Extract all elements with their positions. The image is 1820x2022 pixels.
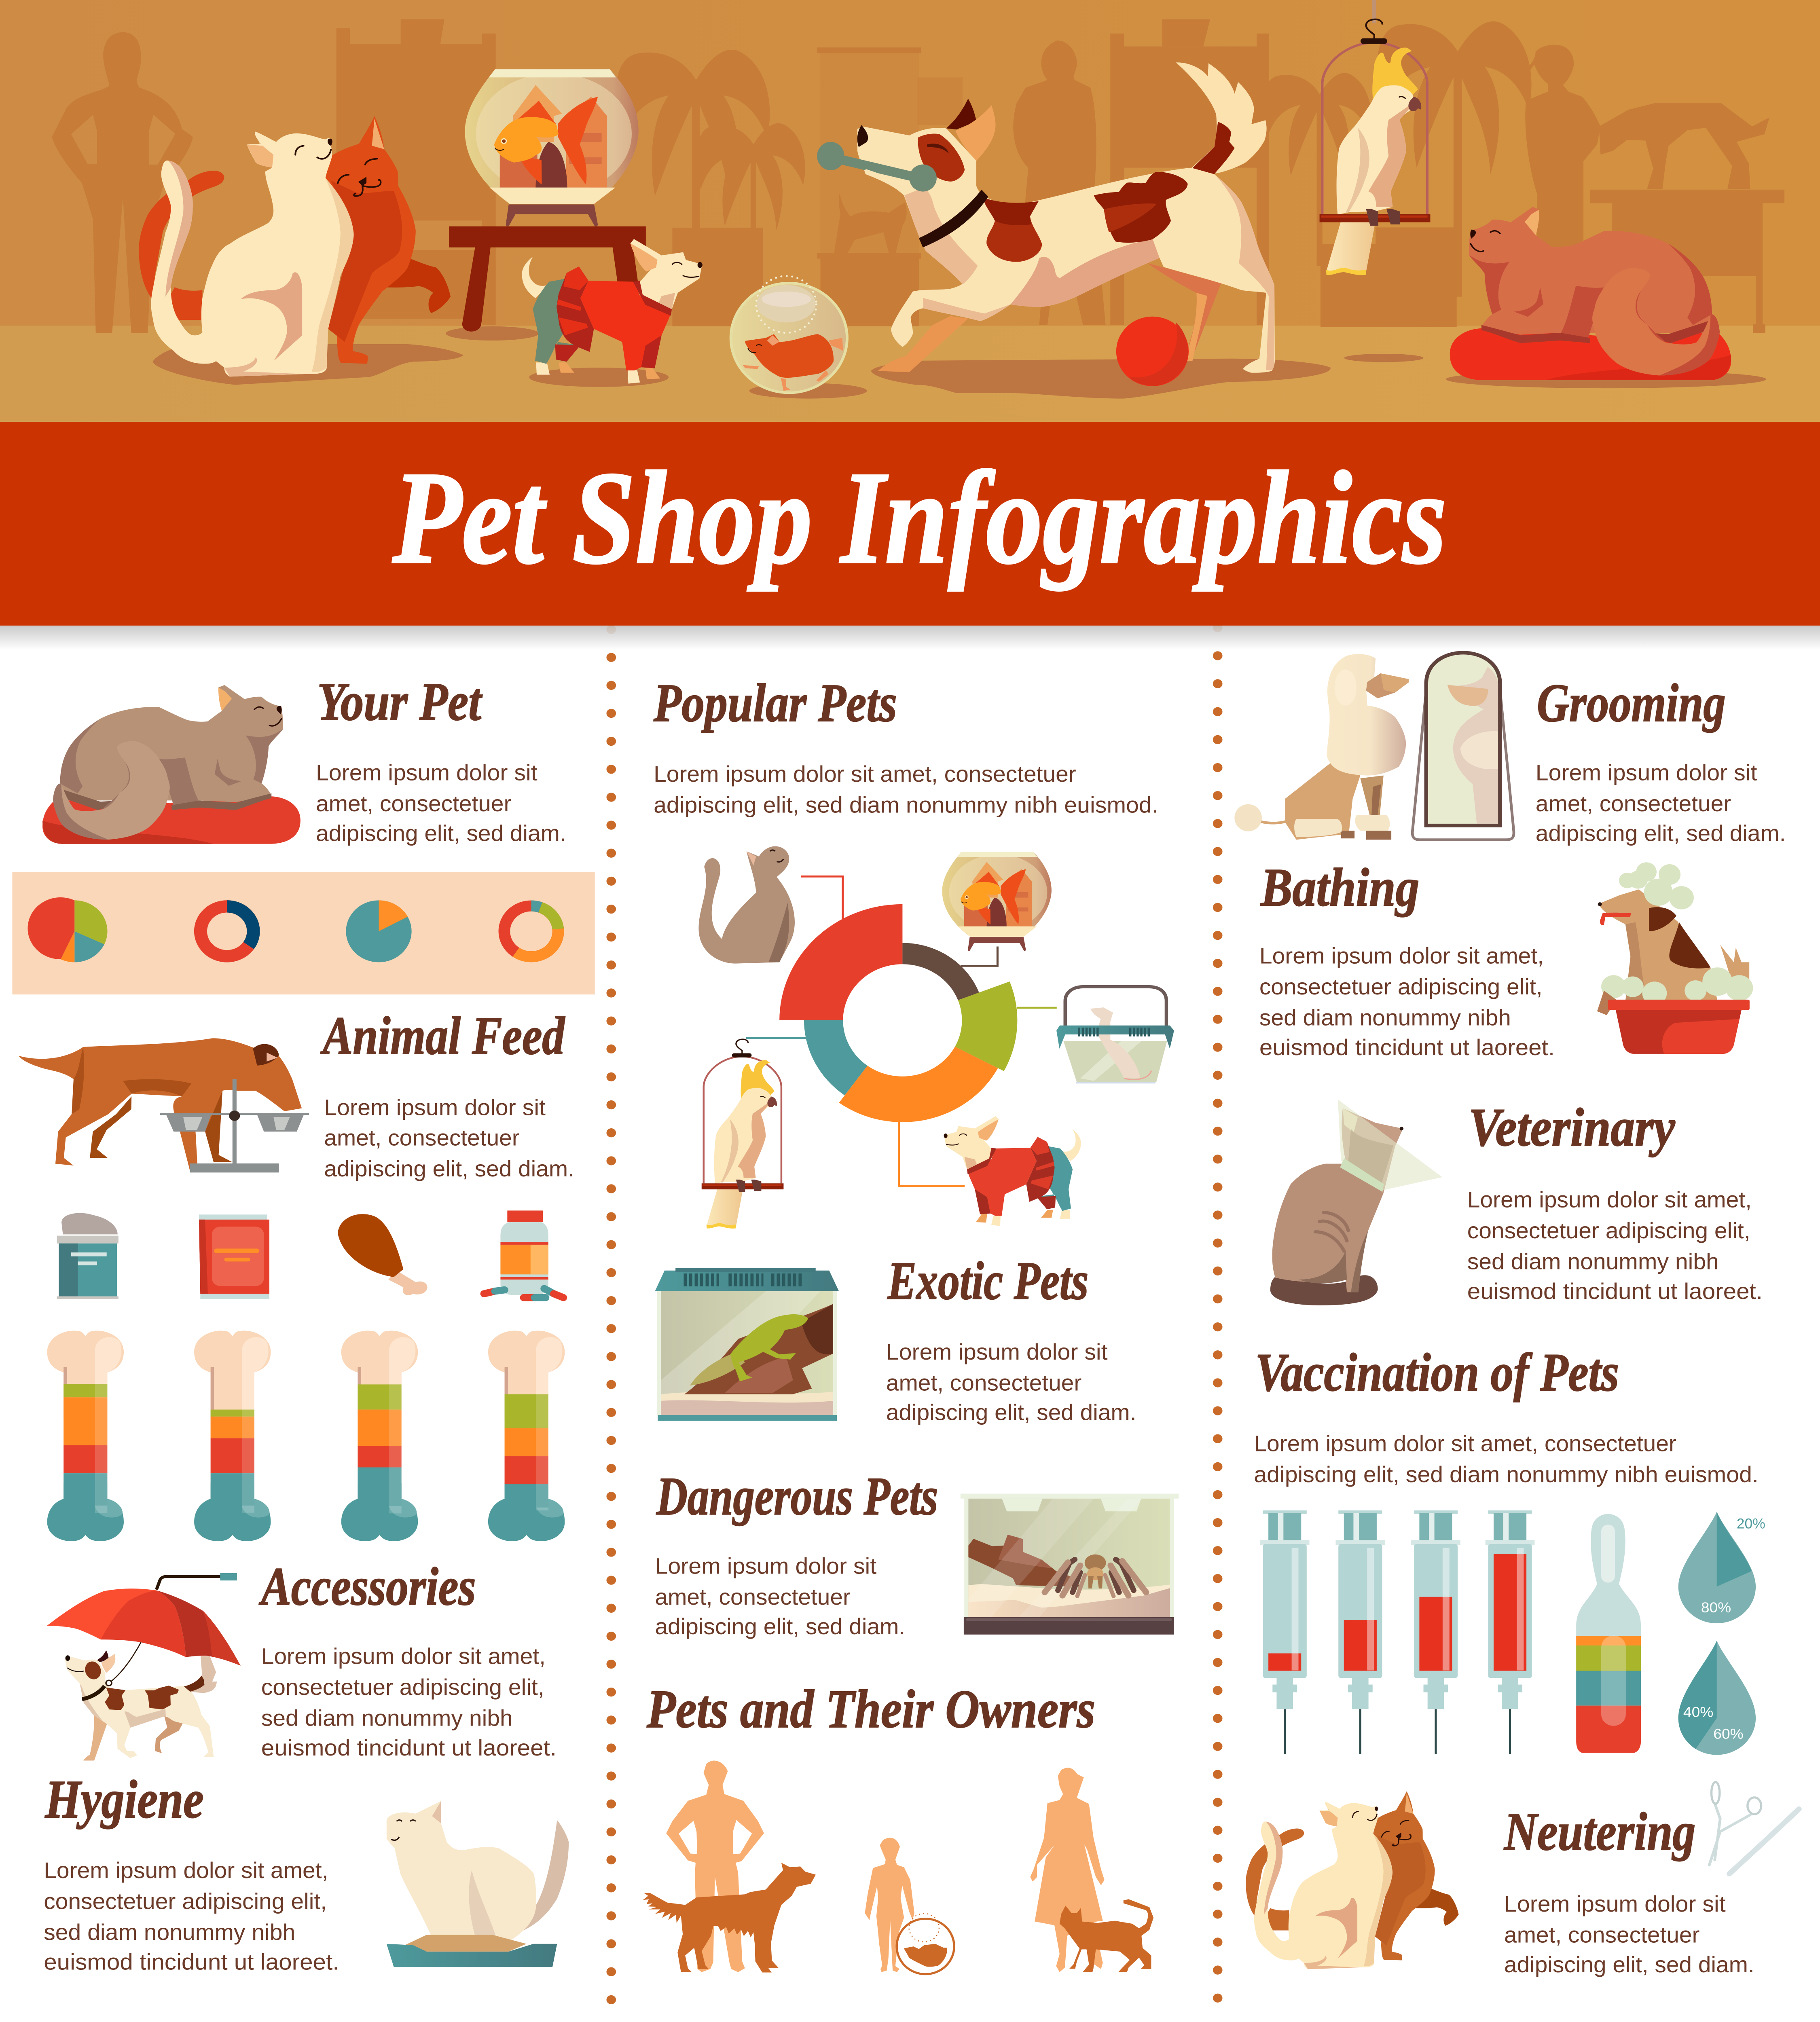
text: neutering: [1504, 1891, 1754, 1977]
text: grooming: Lorem ipsum dolor sit: [1536, 760, 1757, 785]
icon: big dog with bone: [817, 62, 1275, 373]
chart: syringe 1: [1260, 1510, 1310, 1754]
heading: animal feed: Animal Feed: [320, 1006, 565, 1066]
text: animal feed: Lorem ipsum dolor sit: [324, 1095, 546, 1120]
icon: cat on pillow: [1450, 207, 1731, 380]
bone toy: [817, 142, 937, 192]
panel: animal feed: [19, 1006, 574, 1299]
icon: dog with umbrella: [47, 1573, 241, 1760]
panel: vaccination of pets: [1254, 1342, 1765, 1755]
panel: dangerous pets: [655, 1466, 1179, 1639]
table: [449, 226, 646, 332]
text: hygiene: Lorem ipsum dolor sit amet,: [44, 1858, 328, 1883]
text: hygiene: sed diam nonummy nibh: [44, 1920, 295, 1945]
icon: red ball: [1116, 317, 1189, 386]
chart: syringe 4: [1486, 1510, 1534, 1754]
text: neutering: Lorem ipsum dolor sit: [1504, 1891, 1726, 1917]
text: accessories: sed diam nonummy nibh: [261, 1706, 513, 1731]
icon: spider terrarium: [961, 1494, 1179, 1635]
icon: cockatoo cage small: [702, 1039, 783, 1229]
collar: [919, 190, 988, 247]
panel: bathing: [1259, 857, 1753, 1060]
panel: neutering: [1246, 1782, 1799, 1977]
icon: dog eating: [19, 1038, 309, 1172]
label 20%: 20%: [1737, 1516, 1765, 1531]
chart: droplet 80 / 20: [1678, 1512, 1765, 1623]
text: animal feed: adipiscing elit, sed diam.: [324, 1156, 574, 1182]
background shop silhouettes: [52, 19, 1784, 333]
text: accessories: [261, 1644, 557, 1761]
text: veterinary: [1467, 1187, 1763, 1304]
heading: bathing: Bathing: [1260, 857, 1419, 917]
body: [857, 127, 1275, 373]
chart: syringe 2: [1335, 1510, 1385, 1754]
panel: pie charts band: [12, 872, 595, 994]
icon: food bag: [199, 1214, 269, 1299]
chart: donut 2: [201, 906, 253, 956]
text: neutering: adipiscing elit, sed diam.: [1504, 1952, 1754, 1977]
icon: cat silhouette: [1060, 1899, 1153, 1972]
icon: child silhouette: [865, 1838, 914, 1972]
icon: sitting cat: [698, 846, 795, 964]
scene floor: [0, 326, 1820, 423]
text: bathing: euismod tincidunt ut laoreet.: [1259, 1035, 1555, 1060]
text: bathing: [1259, 943, 1555, 1060]
text: exotic pets: adipiscing elit, sed diam.: [886, 1400, 1136, 1425]
icon: cat in litter box: [387, 1801, 569, 1967]
label 60%: 60%: [1713, 1726, 1744, 1742]
icon: man silhouette: [666, 1760, 764, 1972]
text: animal feed: [324, 1095, 574, 1182]
text: bathing: consectetuer adipiscing elit,: [1259, 975, 1543, 1000]
heading: pets and their owners: Pets and Their Owners: [646, 1679, 1095, 1739]
text: accessories: Lorem ipsum dolor sit amet,: [261, 1644, 546, 1669]
umbrella: [157, 1576, 221, 1590]
column divider dots: [611, 628, 1218, 2002]
icon: dog in red dress: [522, 239, 703, 384]
text: veterinary: consectetuer adipiscing elit,: [1467, 1218, 1750, 1244]
text: exotic pets: amet, consectetuer: [886, 1371, 1081, 1396]
title: Pet Shop Infographics: [391, 444, 1447, 592]
label 40%: 40%: [1683, 1704, 1713, 1720]
text: vaccination: Lorem ipsum dolor sit amet, consectetuer: [1254, 1431, 1676, 1456]
panel: bone charts: [47, 1330, 565, 1541]
panel: veterinary: [1270, 1097, 1763, 1305]
chart: pie 1: [28, 897, 107, 962]
icon: cat with cone: [1270, 1100, 1442, 1305]
heading: neutering: Neutering: [1503, 1802, 1695, 1861]
panel: pet shop hero scene: [0, 0, 1820, 423]
text: veterinary: euismod tincidunt ut laoreet.: [1467, 1279, 1763, 1304]
text: bathing: Lorem ipsum dolor sit amet,: [1259, 943, 1544, 969]
heading: popular pets: Popular Pets: [653, 673, 897, 733]
icon: cockatoo in cage: [1320, 0, 1430, 275]
text: grooming: amet, consectetuer: [1536, 791, 1731, 816]
text: exotic pets: Lorem ipsum dolor sit: [886, 1339, 1108, 1364]
text: dangerous pets: Lorem ipsum dolor sit: [655, 1554, 876, 1579]
bone chart 3: [341, 1330, 418, 1541]
text: vaccination: adipiscing elit, sed diam nonummy nibh euismod.: [1254, 1462, 1759, 1487]
spots: [918, 134, 965, 182]
text: animal feed: amet, consectetuer: [324, 1125, 520, 1151]
heading: exotic pets: Exotic Pets: [887, 1251, 1088, 1311]
connector lines: [746, 876, 1057, 1186]
icon: pill bottle: [484, 1210, 563, 1298]
panel: exotic pets: [655, 1251, 1136, 1425]
icon: chicken drumstick: [338, 1214, 427, 1295]
text: vaccination: [1254, 1431, 1759, 1487]
heading: accessories: Accessories: [258, 1556, 476, 1616]
text: accessories: consectetuer adipiscing elit,: [261, 1675, 544, 1700]
ear: [946, 99, 976, 129]
text: hygiene: consectetuer adipiscing elit,: [44, 1889, 327, 1914]
icon: fish bowl small: [942, 852, 1052, 951]
text: neutering: amet, consectetuer: [1504, 1923, 1699, 1948]
chart: syringe 3: [1411, 1510, 1460, 1754]
panel: your pet: [42, 671, 566, 846]
banner: [0, 422, 1820, 626]
feeding stand: [160, 1079, 309, 1172]
text: dangerous pets: adipiscing elit, sed diam.: [655, 1614, 905, 1639]
icon: woman silhouette: [1030, 1768, 1105, 1972]
icon: food can: [57, 1213, 119, 1299]
panel: pets and their owners: [643, 1679, 1153, 1974]
panel: hygiene: [44, 1769, 569, 1975]
text: bathing: sed diam nonummy nibh: [1259, 1005, 1511, 1030]
text: your pet: [316, 760, 566, 846]
text: accessories: euismod tincidunt ut laoreet.: [261, 1736, 557, 1761]
icon: fish bowl: [465, 69, 639, 226]
tail: [1176, 62, 1267, 173]
icon: poodle at mirror: [1234, 653, 1514, 840]
text: veterinary: sed diam nonummy nibh: [1467, 1249, 1719, 1274]
bone chart 4: [488, 1330, 565, 1541]
heading: vaccination of pets: Vaccination of Pets: [1255, 1342, 1619, 1402]
heading: hygiene: Hygiene: [44, 1769, 204, 1829]
heading: dangerous pets: Dangerous Pets: [656, 1466, 938, 1526]
text: dangerous pets: [655, 1554, 905, 1639]
chart: pie 3: [346, 900, 412, 962]
text: popular pets: Lorem ipsum dolor sit amet, consectetuer: [654, 761, 1076, 787]
icon: cat pair brown: [1246, 1791, 1459, 1969]
icon: hamster in ball: [897, 1914, 954, 1974]
text: your pet: Lorem ipsum dolor sit: [316, 760, 538, 785]
text: grooming: [1536, 760, 1786, 846]
band background: [12, 872, 595, 994]
chart: droplet 40 / 60: [1678, 1641, 1756, 1755]
bone chart 2: [194, 1330, 271, 1541]
heading: veterinary: Veterinary: [1469, 1097, 1675, 1157]
icon: dog silhouette: [643, 1863, 816, 1973]
text: veterinary: Lorem ipsum dolor sit amet,: [1467, 1187, 1752, 1212]
label 80%: 80%: [1701, 1599, 1731, 1616]
icon: scissors and scalpel: [1709, 1782, 1799, 1874]
text: exotic pets: [886, 1339, 1136, 1425]
text: your pet: adipiscing elit, sed diam.: [316, 821, 566, 846]
text: grooming: adipiscing elit, sed diam.: [1536, 821, 1786, 846]
icon: cat on red pillow: [42, 685, 301, 844]
nose: [857, 125, 868, 147]
floor shadows: [152, 326, 1766, 399]
panel: grooming: [1234, 653, 1786, 846]
icon: cat pair: [139, 116, 451, 376]
icon: pet carrier with rat: [1056, 987, 1174, 1083]
text: popular pets: adipiscing elit, sed diam nonummy nibh euismod.: [654, 793, 1158, 818]
icon: hamster ball: [731, 276, 847, 393]
heading: grooming: Grooming: [1537, 673, 1726, 733]
panel: popular pets: [653, 673, 1174, 1229]
bone chart 1: [47, 1330, 124, 1541]
chart: radial donut: [779, 904, 1017, 1122]
panel: accessories: [47, 1556, 557, 1761]
scene wall: [0, 0, 1820, 326]
text: hygiene: euismod tincidunt ut laoreet.: [44, 1950, 339, 1975]
icon: dog in dress small: [944, 1116, 1081, 1226]
heading: your pet: Your Pet: [317, 671, 483, 732]
chart: ampoule: [1576, 1514, 1641, 1753]
icon: dog in tub: [1597, 862, 1753, 1054]
text: hygiene: [44, 1858, 339, 1975]
text: your pet: amet, consectetuer: [316, 791, 511, 816]
banner shadow: [0, 626, 1820, 650]
text: dangerous pets: amet, consectetuer: [655, 1584, 851, 1610]
text: popular pets: [654, 761, 1158, 818]
icon: lizard terrarium: [655, 1270, 839, 1421]
chart: donut 4: [504, 906, 558, 957]
